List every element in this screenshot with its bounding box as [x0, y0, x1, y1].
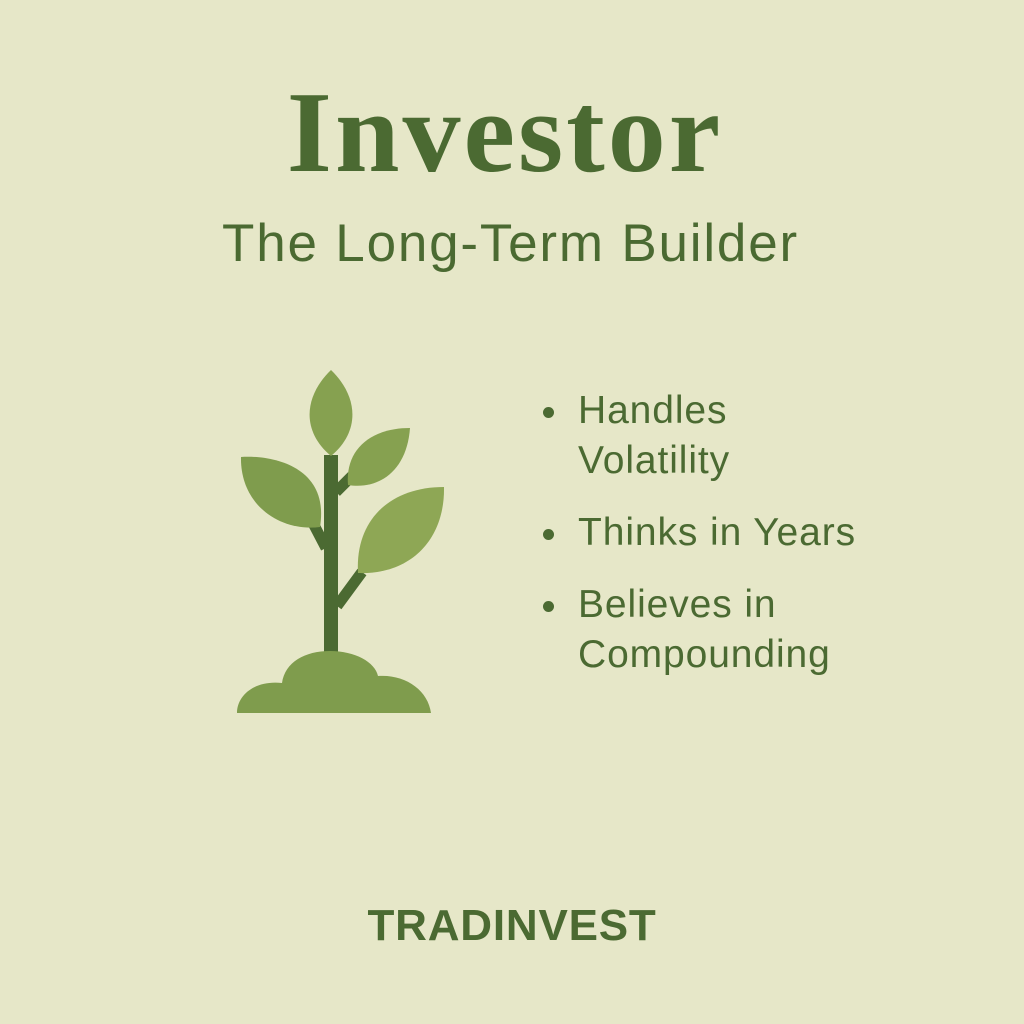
title: Investor [287, 69, 723, 197]
brand footer: TRADINVEST [367, 901, 657, 950]
bullet list [543, 389, 856, 676]
bullet 1: Handles [578, 389, 727, 432]
bullet 1: Volatility [578, 439, 730, 482]
bullet 1 [543, 389, 730, 482]
subtitle: The Long-Term Builder [222, 214, 799, 273]
bullet 2: Thinks in Years [578, 511, 856, 554]
bullet 3 [543, 583, 831, 676]
bullet 3: Believes in [578, 583, 777, 626]
bullet 3: Compounding [578, 633, 831, 676]
